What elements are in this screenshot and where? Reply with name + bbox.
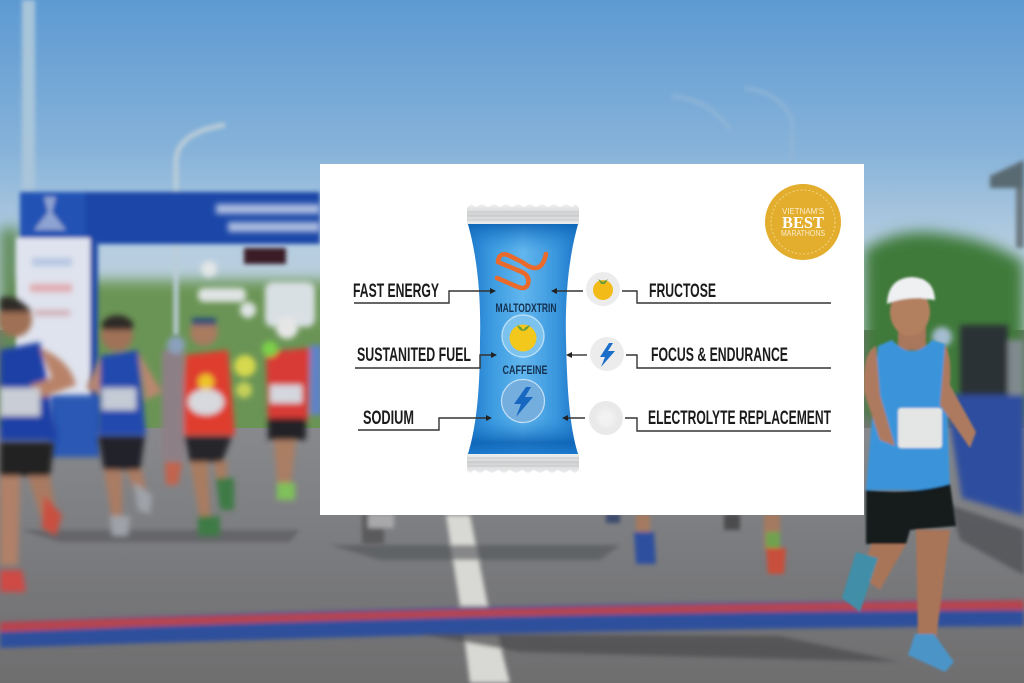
gold badge: MARATHONS	[781, 229, 825, 238]
right callout: fructose	[551, 272, 831, 306]
finish arch	[16, 192, 320, 430]
right callout: focus and endurance: FOCUS & ENDURANCE	[651, 345, 788, 366]
left callout: fast energy: FAST ENERGY	[353, 281, 439, 302]
icon: lightning bolt in circle	[502, 380, 544, 422]
left callout: sodium: SODIUM	[363, 408, 414, 429]
tree line	[0, 228, 1024, 440]
white infographic panel	[320, 164, 864, 515]
top seal creases	[467, 212, 579, 220]
packet body	[468, 224, 578, 454]
right callout: focus and endurance	[566, 337, 831, 371]
arch lettering smudges	[30, 204, 320, 457]
left callout: sustained fuel: SUSTANITED FUEL	[357, 345, 471, 366]
right callout: fructose: FRUCTOSE	[649, 281, 716, 302]
light poles and building	[22, 0, 1024, 335]
sharp runner on the right	[842, 277, 976, 672]
distant buildings	[198, 261, 315, 327]
packet label: caffeine: CAFFEINE	[502, 363, 548, 377]
gold badge: BEST	[782, 213, 825, 232]
icon: orange S logo	[497, 254, 546, 288]
blurred runners below the panel	[362, 514, 786, 574]
energy gel packet	[467, 204, 579, 473]
bottom seal creases	[467, 458, 579, 466]
icon: lightning bolt	[590, 337, 624, 371]
packet side sheen	[472, 224, 574, 454]
road	[0, 428, 1024, 683]
top seal	[467, 204, 579, 225]
blurred runners, left group	[0, 297, 322, 592]
road markings	[0, 505, 1024, 683]
packet label: maltodextrin: MALTODXTRIN	[496, 301, 556, 315]
sky	[0, 0, 1024, 330]
icon: lemon	[586, 272, 620, 306]
right callout: electrolyte replacement: ELECTROLYTE REPLACEMENT	[648, 408, 831, 429]
icon: pale salt mound	[589, 401, 623, 435]
gold badge: VIETNAM'S	[782, 207, 824, 216]
gold badge	[765, 184, 841, 260]
icon: lemon in circle	[502, 315, 544, 357]
right callout: electrolyte replacement	[562, 401, 831, 435]
left callout: sodium	[358, 408, 492, 430]
bottom seal	[467, 453, 579, 473]
right barrier and crowd	[932, 325, 1024, 516]
